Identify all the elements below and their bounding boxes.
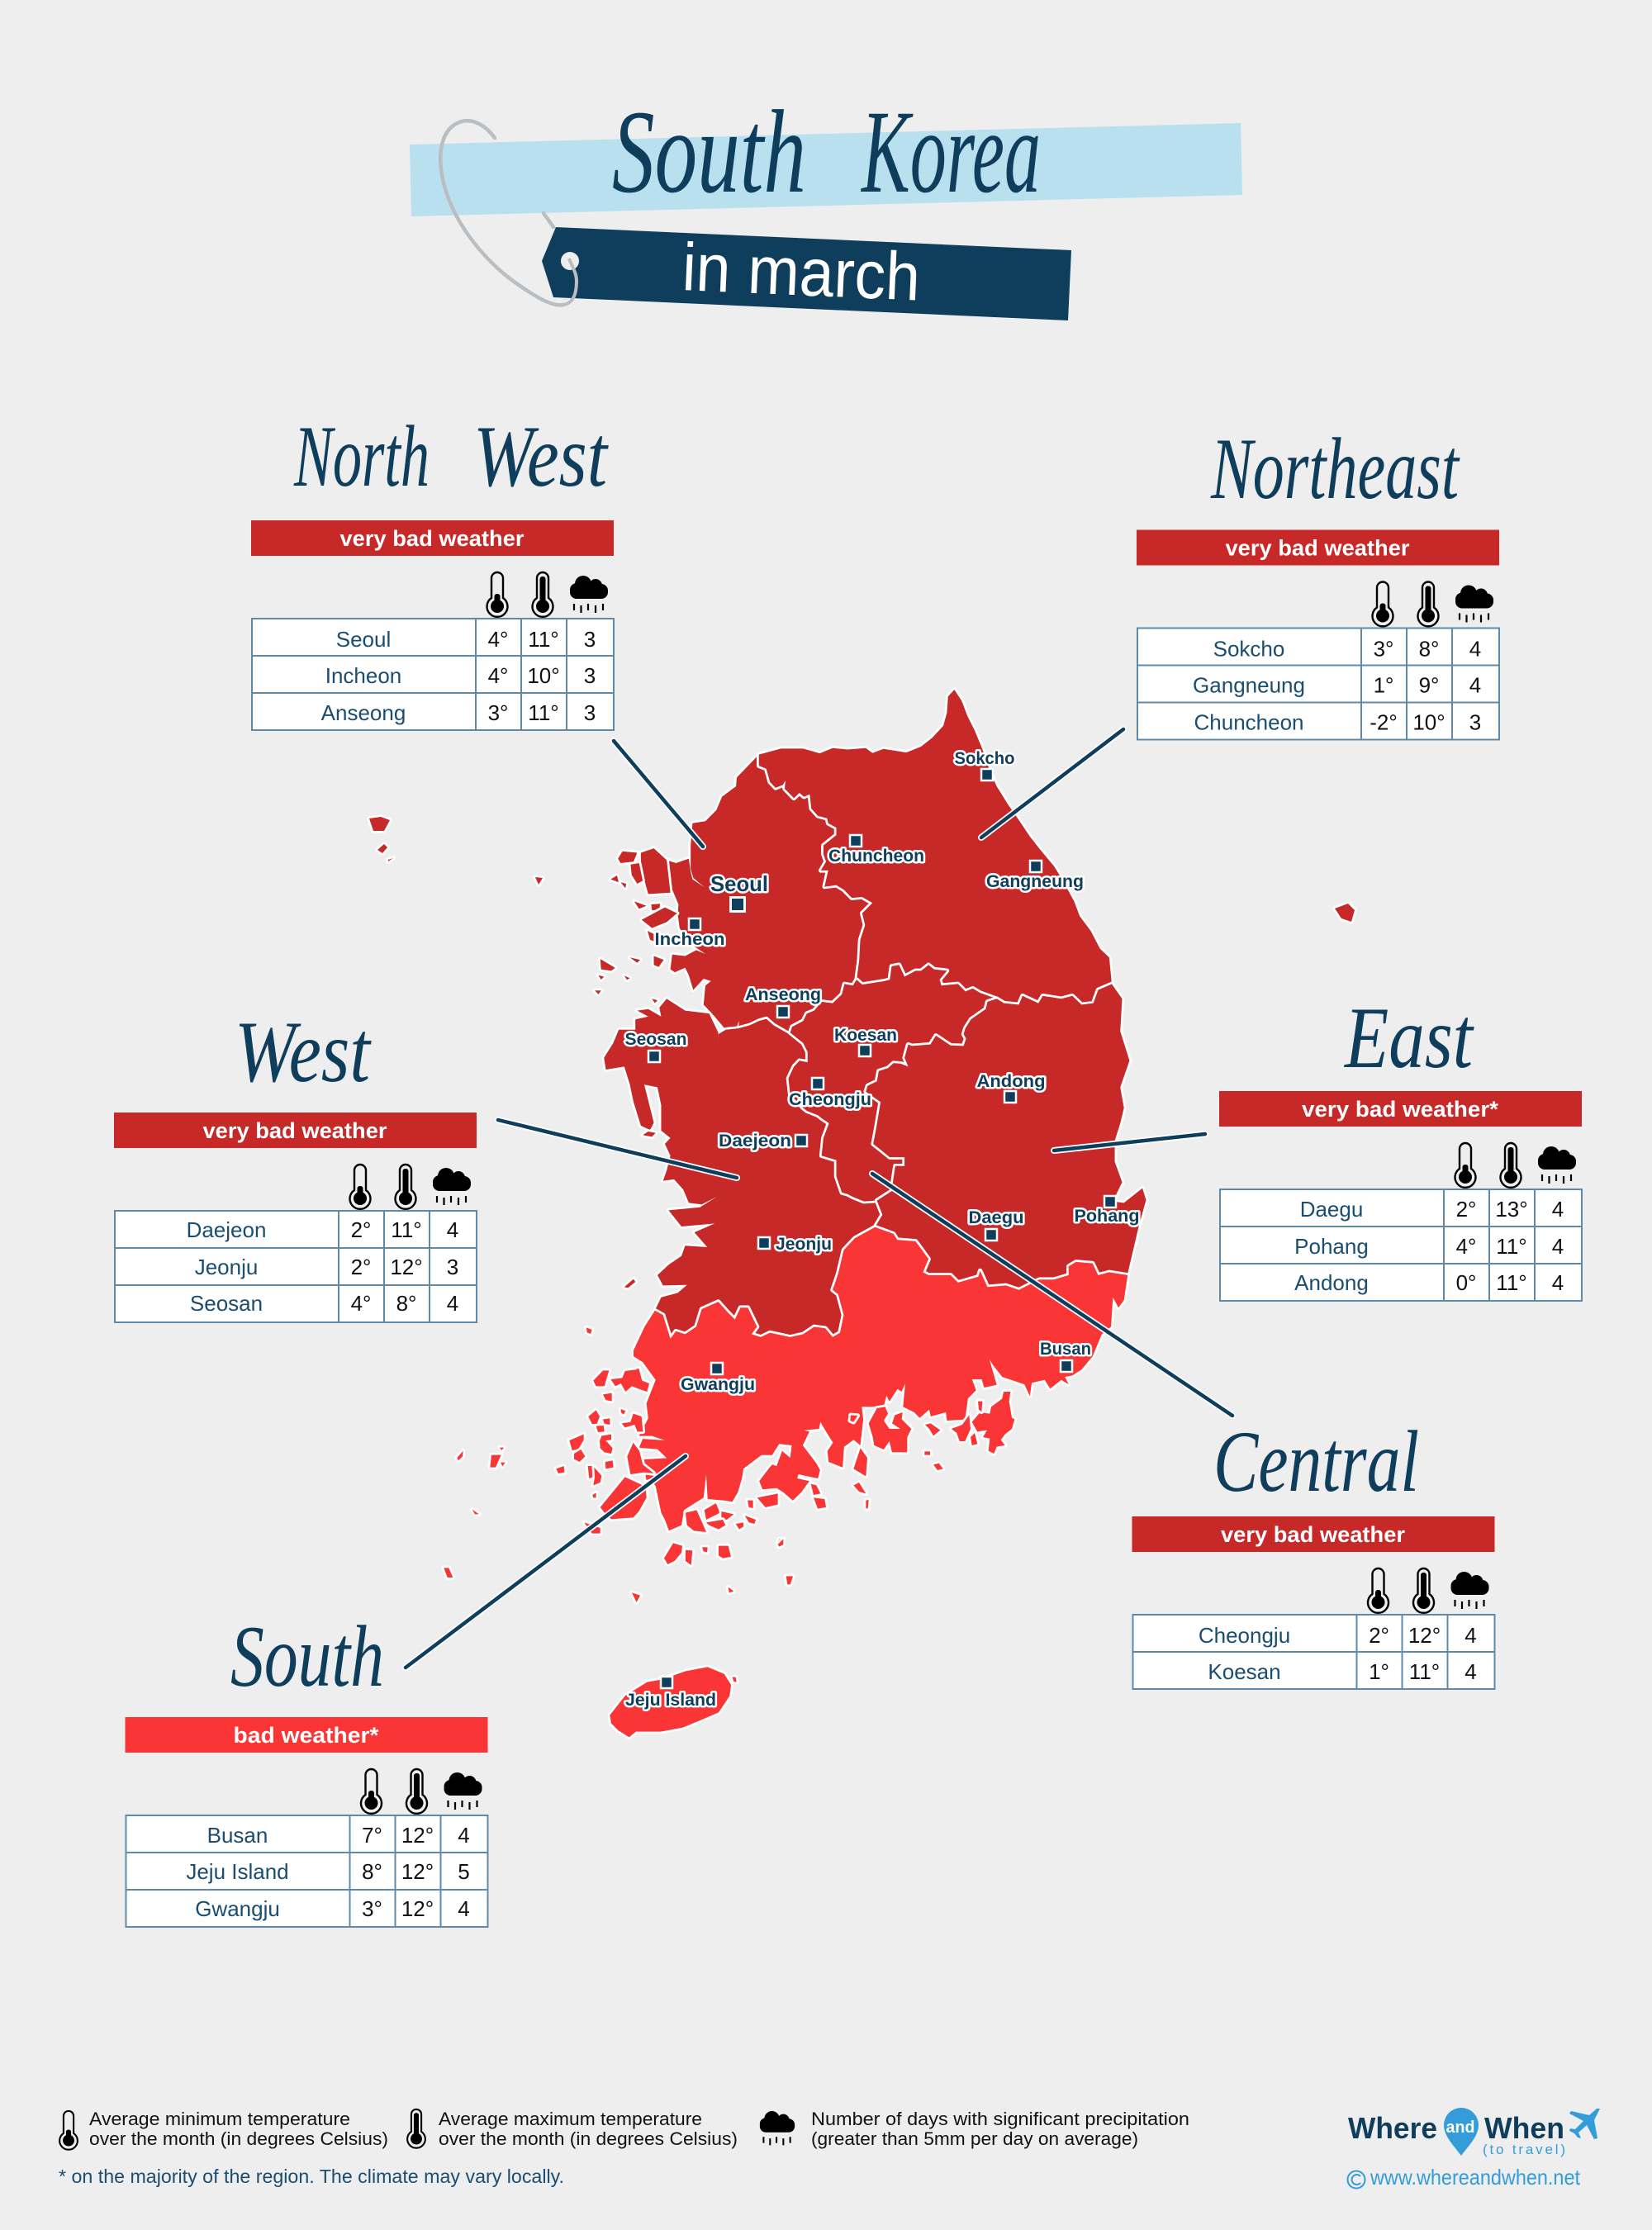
heading: North West: North	[293, 408, 430, 505]
table: 4	[1552, 1197, 1564, 1222]
city: Seoul	[710, 871, 768, 913]
weather bar: very bad weather	[1221, 1522, 1405, 1547]
islands: Namhae and Geoje area	[869, 1392, 1014, 1470]
table: 7°	[362, 1823, 382, 1848]
website: www.whereandwhen.net	[1370, 2165, 1581, 2190]
weather bar	[1137, 530, 1499, 565]
panel: Northeast	[1137, 420, 1499, 740]
leader: Central	[872, 1174, 1232, 1416]
table: Incheon	[325, 663, 401, 688]
table: 4	[458, 1896, 470, 1921]
regions	[595, 690, 1146, 1530]
logo word: Where: Where	[1348, 2111, 1437, 2145]
table: Gangneung	[1193, 672, 1305, 697]
column icons	[350, 1165, 471, 1209]
table: Pohang	[1294, 1234, 1369, 1259]
weather bar: very bad weather	[1226, 535, 1410, 560]
islands: north west coast	[595, 848, 677, 1288]
heading: East: East	[1343, 989, 1474, 1086]
table: 11°	[391, 1217, 422, 1242]
leader: West	[498, 1120, 737, 1178]
table	[1220, 1189, 1582, 1301]
column icons	[487, 572, 608, 617]
table: 4	[1469, 636, 1481, 661]
tag	[542, 227, 1071, 320]
weather bar	[114, 1113, 477, 1148]
table: 3	[584, 700, 596, 725]
table: 11°	[528, 700, 559, 725]
table: 8°	[396, 1291, 416, 1316]
islands: south coast	[686, 1415, 869, 1544]
legend: maximum temperature: Average maximum temperature	[439, 2109, 702, 2129]
table: 8°	[362, 1859, 382, 1884]
city: Pohang	[1074, 1196, 1140, 1226]
panel: North West	[251, 408, 614, 730]
leader: South	[406, 1456, 686, 1668]
table: 3	[1469, 710, 1481, 735]
city: Koesan: Koesan	[834, 1026, 897, 1045]
region: Central	[788, 965, 997, 1202]
city: Koesan	[834, 1026, 897, 1056]
table: Cheongju	[1199, 1623, 1290, 1648]
title band	[410, 123, 1242, 216]
table	[252, 619, 614, 730]
logo tagline: (to travel)	[1483, 2142, 1565, 2157]
leader: Northeast	[981, 729, 1123, 837]
table: 10°	[1412, 710, 1446, 735]
city: Daegu	[968, 1208, 1024, 1241]
weather bar	[1132, 1516, 1495, 1552]
logo word: and: and	[1446, 2118, 1475, 2137]
panel: South	[126, 1608, 487, 1927]
region: North West	[667, 755, 872, 1034]
legend	[59, 2109, 1189, 2187]
table: Seosan	[190, 1291, 263, 1316]
table	[1137, 628, 1499, 740]
logo word: When: When	[1484, 2111, 1564, 2145]
table: 12°	[401, 1823, 434, 1848]
table	[1133, 1615, 1495, 1689]
table: 4	[1552, 1234, 1564, 1259]
weather bar	[1219, 1091, 1582, 1127]
table: 8°	[1419, 636, 1439, 661]
weather bar: very bad weather*	[1302, 1097, 1499, 1122]
table: 12°	[1408, 1623, 1441, 1648]
table: 4	[458, 1823, 470, 1848]
region: South	[634, 1227, 1127, 1530]
city: Jeju Island	[625, 1677, 716, 1710]
panel body	[1132, 1516, 1495, 1689]
city markers and labels	[624, 749, 1140, 1710]
table	[126, 1815, 487, 1927]
table: 3°	[362, 1896, 382, 1921]
panel body	[126, 1717, 487, 1927]
table: Busan	[207, 1823, 268, 1848]
city: Gangneung: Gangneung	[986, 872, 1084, 891]
leader: East	[1054, 1134, 1205, 1151]
leader: North West	[614, 741, 703, 847]
city: Jeonju: Jeonju	[776, 1235, 832, 1254]
table: 4°	[488, 663, 508, 688]
table: 2°	[1369, 1623, 1389, 1648]
table: 2°	[351, 1217, 371, 1242]
table: 3°	[488, 700, 508, 725]
heading: West: West	[235, 1004, 372, 1100]
city: Cheongju	[789, 1078, 871, 1109]
table: Gwangju	[195, 1896, 280, 1921]
table: 4	[1464, 1659, 1477, 1684]
table: Anseong	[321, 700, 406, 725]
city: Sokcho	[955, 749, 1014, 780]
table: 4°	[1456, 1234, 1476, 1259]
table: 3	[447, 1255, 458, 1279]
legend: maximum temperature: over the month (in degrees Celsius)	[439, 2128, 738, 2149]
table: -2°	[1370, 710, 1398, 735]
heading: Central: Central	[1213, 1413, 1419, 1510]
table: 3	[584, 663, 596, 688]
table: 1°	[1369, 1659, 1389, 1684]
table: Daejeon	[187, 1217, 266, 1242]
weather bar: very bad weather	[203, 1118, 387, 1143]
islands: south west archipelago and Jeju	[444, 1327, 793, 1737]
table: 0°	[1456, 1270, 1476, 1295]
region: West	[604, 999, 882, 1339]
tag string	[440, 121, 563, 305]
legend: minimum temperature: Average minimum temperature	[89, 2109, 350, 2129]
map of South Korea	[369, 690, 1355, 1737]
table: 11°	[528, 627, 559, 652]
city: Andong: Andong	[976, 1072, 1046, 1091]
tag hole	[561, 252, 579, 270]
heading: Northeast: Northeast	[1210, 420, 1460, 517]
panel body	[1219, 1091, 1582, 1301]
islands: far north west and Ulleungdo	[369, 817, 1355, 922]
panel: East	[1219, 989, 1582, 1301]
panel: Central	[1132, 1413, 1495, 1689]
title text: Korea	[861, 87, 1041, 218]
city: Anseong: Anseong	[745, 985, 821, 1004]
city: Seoul: Seoul	[710, 871, 768, 896]
panel body	[114, 1113, 477, 1322]
table: Daegu	[1300, 1197, 1363, 1222]
column icons	[1373, 581, 1493, 626]
heading: North West: West	[473, 408, 609, 505]
column icons	[1455, 1143, 1576, 1188]
city: Gwangju: Gwangju	[681, 1375, 755, 1394]
table: 12°	[401, 1859, 434, 1884]
title text: South	[612, 87, 806, 218]
heading: South: South	[230, 1608, 384, 1705]
weather bar: bad weather*	[233, 1723, 379, 1748]
island: Jeju	[610, 1667, 731, 1737]
table: 1°	[1374, 672, 1393, 697]
table: 2°	[1456, 1197, 1476, 1222]
subtitle text: in march	[681, 230, 922, 316]
table: 3°	[1374, 636, 1393, 661]
panel: West	[114, 1004, 477, 1322]
table: 13°	[1495, 1197, 1528, 1222]
logo: Where and When	[1348, 2108, 1600, 2190]
city: Chuncheon: Chuncheon	[828, 847, 924, 866]
city: Busan	[1040, 1340, 1091, 1372]
city: Incheon	[654, 918, 725, 949]
table: 12°	[390, 1255, 423, 1279]
panel body	[1137, 530, 1499, 740]
title block	[410, 87, 1242, 320]
legend: maximum temperature	[407, 2109, 738, 2149]
city: Cheongju: Cheongju	[789, 1090, 871, 1109]
table: 4°	[351, 1291, 371, 1316]
title text	[612, 87, 1041, 218]
table	[115, 1211, 477, 1322]
table: 12°	[401, 1896, 434, 1921]
city: Andong	[976, 1072, 1046, 1103]
icon: map pin	[1444, 2108, 1479, 2156]
table: 11°	[1496, 1234, 1527, 1259]
table: 4	[1552, 1270, 1564, 1295]
region: Northeast	[759, 690, 1112, 1004]
city: Busan: Busan	[1040, 1340, 1091, 1359]
legend: minimum temperature: over the month (in degrees Celsius)	[89, 2128, 388, 2149]
table: 10°	[527, 663, 560, 688]
table: 11°	[1496, 1270, 1527, 1295]
leader lines	[406, 729, 1232, 1668]
legend: precipitation	[760, 2109, 1189, 2149]
icon: plane	[1569, 2109, 1600, 2139]
city: Sokcho: Sokcho	[955, 749, 1014, 768]
city: Gangneung	[986, 861, 1084, 891]
table: Seoul	[336, 627, 391, 652]
table: 2°	[351, 1255, 371, 1279]
table: 9°	[1419, 672, 1439, 697]
region: East	[866, 984, 1146, 1290]
weather bar	[126, 1717, 487, 1753]
string over tag	[516, 259, 577, 305]
legend: precipitation: Number of days with significant precipitation	[811, 2109, 1189, 2129]
legend: minimum temperature	[59, 2109, 388, 2150]
column icons	[361, 1769, 482, 1814]
city: Seosan	[624, 1030, 687, 1062]
city: Pohang: Pohang	[1074, 1207, 1140, 1226]
weather bar: very bad weather	[340, 526, 525, 551]
city: Chuncheon	[828, 835, 924, 866]
table: 4	[447, 1217, 458, 1242]
column icons	[1368, 1568, 1488, 1613]
icon: copyright	[1348, 2171, 1365, 2189]
table: Jeonju	[195, 1255, 258, 1279]
table: Andong	[1294, 1270, 1369, 1295]
footnote: * on the majority of the region. The climate may vary locally.	[59, 2166, 564, 2187]
table: Koesan	[1208, 1659, 1281, 1684]
table: 4°	[488, 627, 508, 652]
city: Anseong	[745, 985, 821, 1018]
table: Chuncheon	[1194, 710, 1303, 735]
table: 4	[447, 1291, 458, 1316]
table: 4	[1464, 1623, 1477, 1648]
table: 4	[1469, 672, 1481, 697]
table: 3	[584, 627, 596, 652]
table: Jeju Island	[186, 1859, 289, 1884]
city: Daejeon: Daejeon	[719, 1132, 791, 1151]
city: Seosan: Seosan	[624, 1030, 687, 1049]
table: 11°	[1409, 1659, 1440, 1684]
city: Jeju Island: Jeju Island	[625, 1691, 716, 1710]
heading: North West	[293, 408, 609, 505]
city: Daegu: Daegu	[968, 1208, 1024, 1227]
city: Gwangju	[681, 1363, 755, 1394]
legend: precipitation: (greater than 5mm per day on average)	[811, 2128, 1138, 2149]
table: Sokcho	[1213, 636, 1284, 661]
weather bar	[251, 520, 614, 556]
city: Incheon: Incheon	[654, 930, 725, 949]
table: 5	[458, 1859, 470, 1884]
